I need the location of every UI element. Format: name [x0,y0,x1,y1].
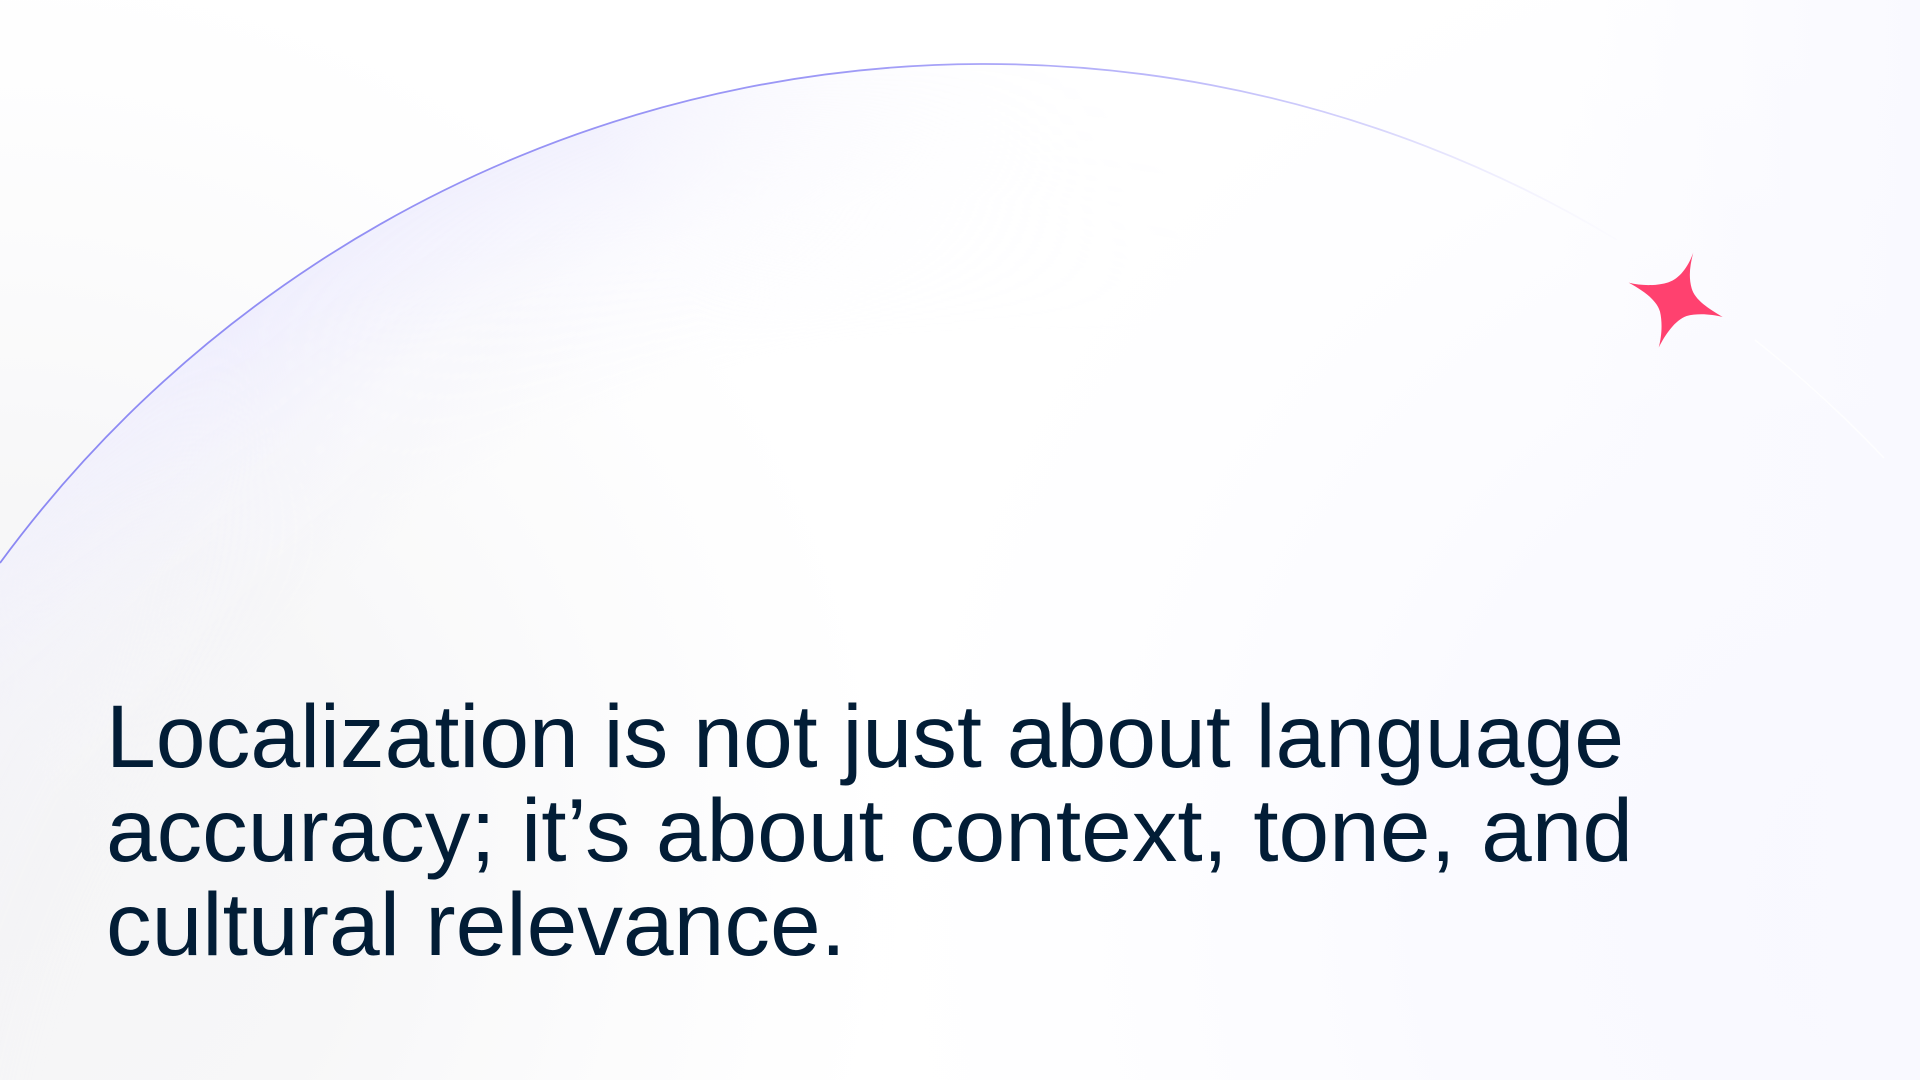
arc glow [92,97,714,454]
main statement text: cultural relevance. [106,874,846,974]
main statement text: accuracy; it’s about context, tone, and [106,780,1633,880]
main statement text: Localization is not just about language [106,686,1624,786]
icon: pink four-point star [1629,252,1723,348]
thin arc line [0,64,1617,563]
faint arc continuation [1755,340,1884,458]
main statement text [106,686,1633,974]
